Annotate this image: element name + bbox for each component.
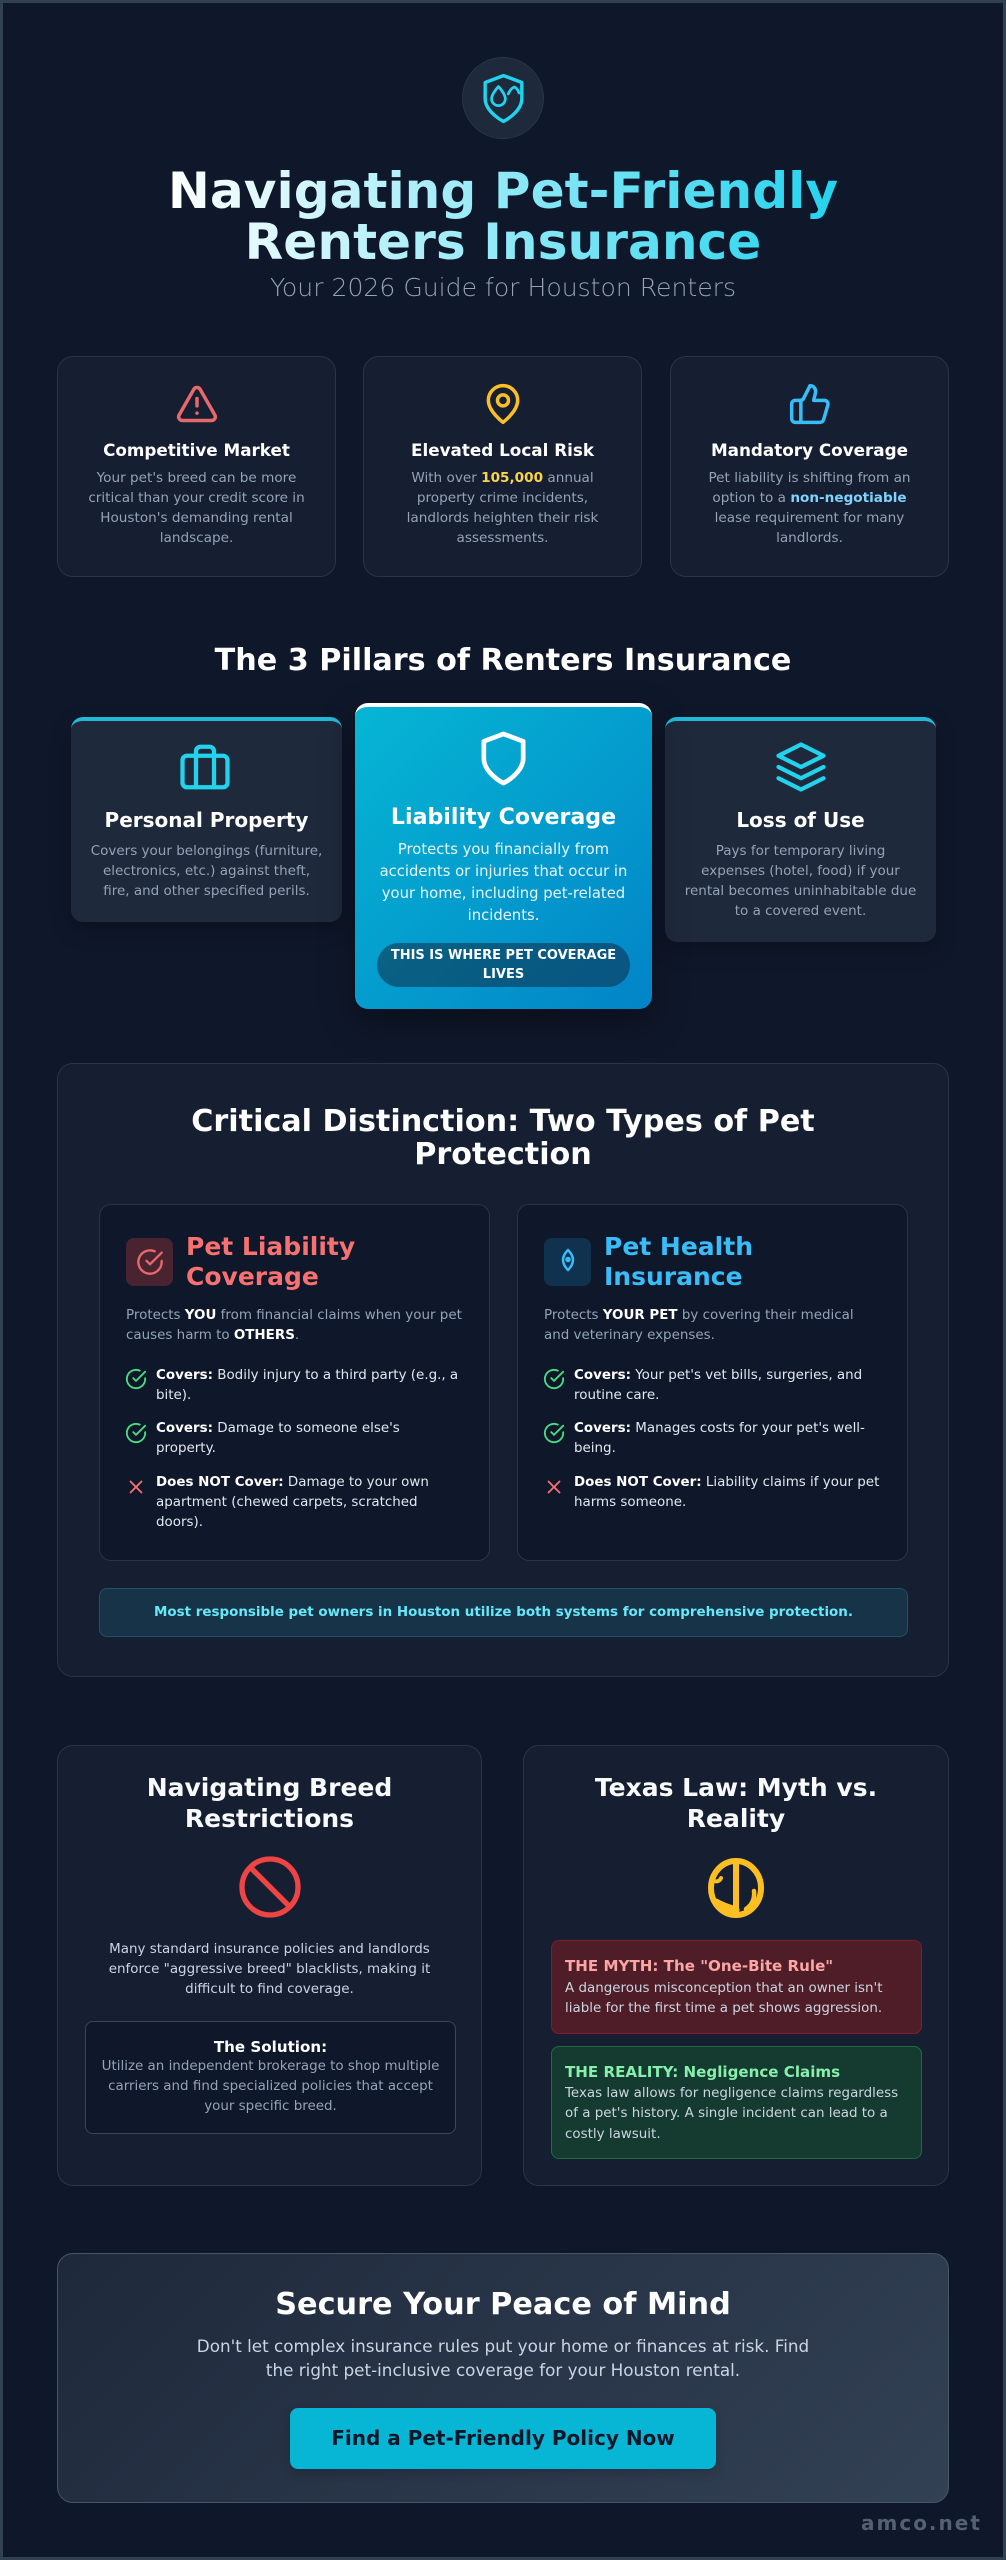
heading xyxy=(147,1773,392,1833)
panel: pet health insurance xyxy=(517,1204,908,1561)
icon: briefcase xyxy=(180,744,230,790)
description: Protects YOUR PET by covering their medical xyxy=(544,1308,854,1323)
description: Pays for temporary living xyxy=(716,843,885,859)
list item xyxy=(574,1368,862,1403)
icon: scale circle xyxy=(708,1858,764,1918)
panel: competitive market xyxy=(57,356,336,577)
callout text: of a pet's history. A single incident can lead to a xyxy=(565,2106,888,2121)
callout text: your specific breed. xyxy=(204,2099,337,2114)
description xyxy=(91,843,322,899)
list item xyxy=(156,1368,458,1403)
panel: loss of use xyxy=(665,717,936,942)
watermark: amco.net xyxy=(861,2511,982,2535)
description: Pet liability is shifting from an xyxy=(708,470,911,486)
list item xyxy=(574,1421,865,1456)
panel: call to action xyxy=(57,2253,949,2503)
heading: Competitive Market xyxy=(103,440,290,460)
section heading xyxy=(191,1104,815,1172)
description xyxy=(109,1942,430,1997)
heading xyxy=(186,1232,355,1291)
callout: both systems: Most responsible pet owners in Houston utilize both systems for comprehensive protection. xyxy=(154,1605,853,1620)
description: accidents or injuries that occur in xyxy=(380,863,627,880)
callout text xyxy=(565,1981,883,2016)
description: landlords. xyxy=(776,530,843,546)
description: difficult to find coverage. xyxy=(185,1982,354,1997)
icon: check xyxy=(126,1368,146,1390)
description: assessments. xyxy=(456,530,548,546)
description xyxy=(126,1308,462,1343)
heading: Elevated Local Risk xyxy=(411,440,594,460)
callout: the solution xyxy=(85,2021,456,2134)
button: Find a Pet-Friendly Policy Now xyxy=(331,2426,675,2450)
section heading: Critical Distinction: Two Types of Pet xyxy=(191,1104,815,1139)
heading xyxy=(604,1232,753,1291)
description: electronics, etc.) against theft, xyxy=(103,863,310,879)
description: landlords heighten their risk xyxy=(407,510,598,526)
icon: check xyxy=(544,1422,564,1444)
panel: critical distinction xyxy=(57,1063,949,1677)
heading: Liability Coverage xyxy=(391,804,616,830)
header icon: shield with drop xyxy=(462,57,544,139)
description: the right pet-inclusive coverage for your Houston rental. xyxy=(266,2360,740,2380)
callout heading: THE REALITY: Negligence Claims xyxy=(565,2063,840,2081)
callout badge: THIS IS WHERE PET COVERAGE xyxy=(391,948,616,963)
description: enforce "aggressive breed" blacklists, making it xyxy=(109,1962,430,1977)
description: fire, and other specified perils. xyxy=(103,883,310,899)
callout text: liable for the first time a pet shows aggression. xyxy=(565,2001,882,2016)
list item xyxy=(156,1475,429,1530)
description xyxy=(88,470,305,546)
heading: Pet Liability xyxy=(186,1232,355,1261)
description: Houston's demanding rental xyxy=(100,510,293,526)
icon: ban xyxy=(239,1856,301,1918)
icon: shield xyxy=(482,732,526,786)
description xyxy=(544,1308,854,1343)
icon: cross xyxy=(548,1480,560,1494)
heading: Secure Your Peace of Mind xyxy=(275,2287,731,2322)
description: Covers your belongings (furniture, xyxy=(91,843,322,859)
list item xyxy=(574,1475,880,1510)
callout text: carriers and find specialized policies that accept xyxy=(108,2079,433,2094)
heading: Mandatory Coverage xyxy=(711,440,908,460)
description: to a covered event. xyxy=(735,903,866,919)
heading: Pet Health xyxy=(604,1232,753,1261)
callout badge: LIVES xyxy=(483,967,524,982)
callout badge xyxy=(377,943,630,987)
heading: Coverage xyxy=(186,1262,319,1291)
description: expenses (hotel, food) if your xyxy=(701,863,900,879)
icon: warning triangle xyxy=(176,386,218,422)
callout: both systems xyxy=(99,1588,908,1637)
heading: Navigating Breed xyxy=(147,1773,392,1802)
list item: doors). xyxy=(156,1515,203,1530)
section heading: pillars: The 3 Pillars of Renters Insurance xyxy=(215,643,791,678)
list item: being. xyxy=(574,1441,616,1456)
callout text: Texas law allows for negligence claims regardless xyxy=(565,2086,898,2101)
description: property crime incidents, xyxy=(417,490,588,506)
description: Many standard insurance policies and landlords xyxy=(109,1942,430,1957)
title xyxy=(153,165,853,267)
list item: bite). xyxy=(156,1388,191,1403)
title: Navigating Pet-Friendly xyxy=(168,161,838,220)
panel: elevated local risk xyxy=(363,356,642,577)
icon: check xyxy=(126,1422,146,1444)
description: lease requirement for many xyxy=(715,510,904,526)
description: causes harm to OTHERS. xyxy=(126,1328,299,1343)
callout text: Utilize an independent brokerage to shop multiple xyxy=(102,2059,439,2074)
description: Don't let complex insurance rules put your home or finances at risk. Find xyxy=(197,2336,809,2356)
list item: apartment (chewed carpets, scratched xyxy=(156,1495,418,1510)
description xyxy=(380,841,627,924)
description: option to a non-negotiable xyxy=(712,490,907,506)
list item: property. xyxy=(156,1441,216,1456)
description: With over 105,000 annual xyxy=(411,470,594,486)
callout text xyxy=(102,2059,439,2114)
description: incidents. xyxy=(468,907,539,924)
panel: texas law xyxy=(523,1745,949,2186)
description: landscape. xyxy=(160,530,233,546)
panel: liability coverage xyxy=(355,703,652,1009)
heading: Restrictions xyxy=(185,1804,354,1833)
list item: Covers: Your pet's vet bills, surgeries, and xyxy=(574,1368,862,1383)
callout heading: The Solution: xyxy=(214,2038,327,2056)
list item xyxy=(156,1421,400,1456)
list item: routine care. xyxy=(574,1388,659,1403)
button xyxy=(290,2408,716,2469)
callout: the reality xyxy=(551,2046,922,2159)
panel: personal property xyxy=(71,717,342,922)
list item: Does NOT Cover: Damage to your own xyxy=(156,1475,429,1490)
icon: check xyxy=(544,1368,564,1390)
list item: harms someone. xyxy=(574,1495,686,1510)
heading: Personal Property xyxy=(105,808,308,832)
description xyxy=(407,470,598,546)
subtitle: Your 2026 Guide for Houston Renters xyxy=(270,273,736,302)
callout text: A dangerous misconception that an owner isn't xyxy=(565,1981,883,1996)
icon: thumbs up xyxy=(790,384,830,424)
icon: layers xyxy=(776,742,826,792)
heading: Reality xyxy=(687,1804,785,1833)
heading: Texas Law: Myth vs. xyxy=(595,1773,877,1802)
panel: mandatory coverage xyxy=(670,356,949,577)
icon: health badge xyxy=(544,1238,591,1286)
icon: cross xyxy=(130,1480,142,1494)
title: Renters Insurance xyxy=(245,212,761,271)
panel: pet liability coverage xyxy=(99,1204,490,1561)
description: rental becomes uninhabitable due xyxy=(685,883,916,899)
description: Protects YOU from financial claims when your pet xyxy=(126,1308,462,1323)
description xyxy=(708,470,911,546)
description: Your pet's breed can be more xyxy=(97,470,296,486)
callout text: costly lawsuit. xyxy=(565,2127,661,2142)
heading xyxy=(595,1773,877,1833)
icon: check badge xyxy=(126,1238,173,1286)
description: your home, including pet-related xyxy=(382,885,625,902)
description: critical than your credit score in xyxy=(88,490,305,506)
description xyxy=(685,843,916,919)
heading: Insurance xyxy=(604,1262,743,1291)
list item: Does NOT Cover: Liability claims if your pet xyxy=(574,1475,879,1490)
panel: breed restrictions xyxy=(57,1745,482,2186)
list item: Covers: Bodily injury to a third party (e.g., a xyxy=(156,1368,458,1383)
list item: Covers: Damage to someone else's xyxy=(156,1421,400,1436)
description: and veterinary expenses. xyxy=(544,1328,715,1343)
list item: Covers: Manages costs for your pet's well- xyxy=(574,1421,865,1436)
description xyxy=(197,2336,809,2380)
callout heading: THE MYTH: The "One-Bite Rule" xyxy=(565,1957,833,1975)
callout: the myth xyxy=(551,1940,922,2034)
section heading: Protection xyxy=(414,1137,592,1172)
heading: Loss of Use xyxy=(736,808,865,832)
description: Protects you financially from xyxy=(398,841,609,858)
callout text xyxy=(564,2086,898,2142)
icon: map pin xyxy=(486,384,520,424)
